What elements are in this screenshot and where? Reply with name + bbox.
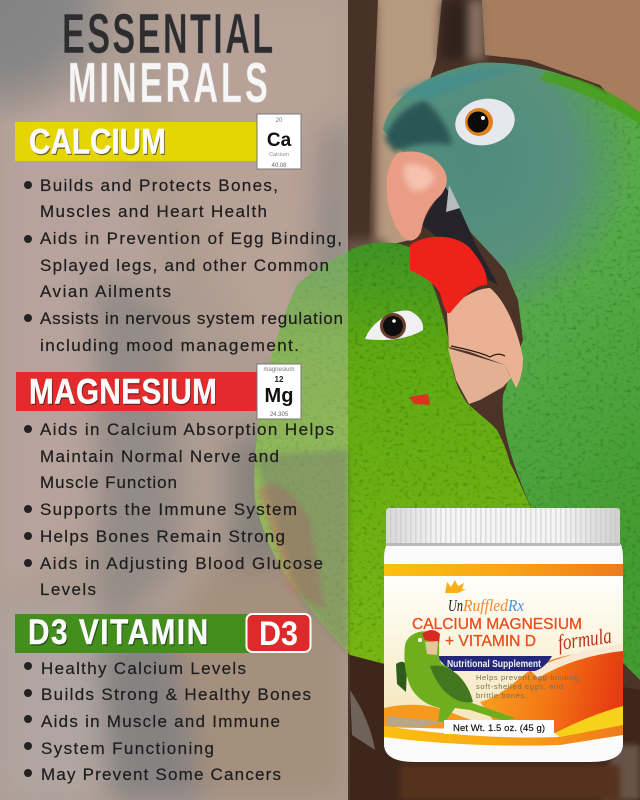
periodic tile: Ca: 40.08 xyxy=(271,163,287,169)
magnesium bullet list: Aids in Adjusting Blood Glucose xyxy=(40,554,323,573)
small parrot eye xyxy=(365,311,423,340)
panel: vitamin d3 xyxy=(15,613,311,784)
top band xyxy=(384,564,623,576)
calcium bullet list: Aids in Prevention of Egg Binding, xyxy=(40,229,342,248)
periodic tile: Mg: magnesium xyxy=(263,367,295,373)
parrot on label xyxy=(387,630,515,727)
d3 bullet list: Healthy Calcium Levels xyxy=(41,659,246,678)
calcium heading: CALCIUM xyxy=(29,122,166,161)
d3 badge: D3 xyxy=(259,615,298,653)
d3 bullet list: Builds Strong & Healthy Bones xyxy=(41,685,311,704)
claim text xyxy=(476,673,581,700)
panel: calcium xyxy=(15,114,343,355)
panel: translucent left column xyxy=(0,0,348,800)
d3 bullet list: System Functioning xyxy=(41,739,214,758)
calcium bullet list: Avian Ailments xyxy=(40,282,171,301)
periodic tile: Ca: Calcium xyxy=(269,152,289,158)
magnesium bullet list: Aids in Calcium Absorption Helps xyxy=(40,420,334,439)
nutritional supplement ribbon xyxy=(436,656,552,671)
d3 bullet list: Aids in Muscle and Immune xyxy=(41,712,280,731)
product name: CALCIUM MAGNESIUM xyxy=(412,616,582,633)
calcium bullet list: including mood management. xyxy=(40,336,299,355)
periodic tile: Mg: 24.305 xyxy=(270,412,289,418)
brand logo xyxy=(445,580,524,615)
blurred rock under left column xyxy=(0,0,348,800)
calcium heading: CALCIUM xyxy=(30,124,167,163)
title: essential minerals xyxy=(62,1,273,114)
calcium bullet list xyxy=(24,176,343,355)
claim text: Helps prevent egg-binding, xyxy=(476,673,581,682)
panel: magnesium xyxy=(16,364,334,599)
magnesium bullet list xyxy=(24,420,334,599)
product name: + VITAMIN D xyxy=(445,633,536,650)
lower branch xyxy=(350,640,640,800)
periodic tile: Mg: 12 xyxy=(275,375,284,384)
magnesium bullet list: Levels xyxy=(40,580,96,599)
brand logo: Un xyxy=(448,596,463,615)
jar body xyxy=(384,544,623,762)
magnesium bullet list: Helps Bones Remain Strong xyxy=(40,527,285,546)
periodic tile: Ca: 20 xyxy=(276,118,283,124)
d3 bullet list xyxy=(24,659,311,784)
title: essential minerals: MINERALS xyxy=(68,50,268,114)
big parrot eye xyxy=(451,93,519,151)
claim text: soft-shelled eggs, and xyxy=(476,682,563,691)
calcium bullet list: Assists in nervous system regulation xyxy=(40,309,343,328)
net weight tag: Net Wt. 1.5 oz. (45 g) xyxy=(453,723,545,734)
magnesium bullet list: Muscle Function xyxy=(40,473,177,492)
d3 badge xyxy=(246,614,310,653)
periodic tile: Ca xyxy=(257,114,301,169)
upper beak xyxy=(387,152,447,241)
d3 banner xyxy=(15,614,250,653)
magnesium bullet list: Maintain Normal Nerve and xyxy=(40,447,279,466)
product name xyxy=(412,616,582,650)
formula script: formula xyxy=(556,623,613,655)
d3 heading: D3 VITAMIN xyxy=(28,613,208,652)
open mouth xyxy=(422,185,498,285)
claim text: brittle bones. xyxy=(476,691,527,700)
magnesium bullet list: Supports the Immune System xyxy=(40,500,297,519)
calcium bullet list: Builds and Protects Bones, xyxy=(40,176,278,195)
d3 heading: D3 VITAMIN xyxy=(29,614,209,653)
magnesium banner xyxy=(16,372,258,411)
periodic tile: Mg xyxy=(257,364,301,419)
small parrot xyxy=(254,237,532,668)
big parrot xyxy=(380,60,640,680)
periodic tile: Mg: Mg xyxy=(265,385,293,407)
lower beak xyxy=(448,348,511,404)
title: essential minerals: ESSENTIAL xyxy=(62,1,273,65)
red forehead xyxy=(410,237,487,313)
periodic tile: Ca: Ca xyxy=(267,130,292,151)
d3 bullet list: May Prevent Some Cancers xyxy=(41,765,281,784)
brand logo: Ruffled xyxy=(462,596,508,615)
upper beak xyxy=(447,288,523,388)
nutritional supplement ribbon: Nutritional Supplement xyxy=(447,658,541,670)
jar lid xyxy=(386,508,620,546)
net weight tag xyxy=(444,720,554,734)
magnesium heading: MAGNESIUM xyxy=(29,372,217,411)
calcium bullet list: Splayed legs, and other Common xyxy=(40,256,329,275)
product jar xyxy=(384,508,623,762)
magnesium heading: MAGNESIUM xyxy=(30,374,218,413)
bottom band xyxy=(384,725,623,746)
calcium bullet list: Muscles and Heart Health xyxy=(40,202,267,221)
label gradient xyxy=(384,576,623,738)
calcium banner xyxy=(15,122,258,161)
brand logo: Rx xyxy=(507,596,524,615)
